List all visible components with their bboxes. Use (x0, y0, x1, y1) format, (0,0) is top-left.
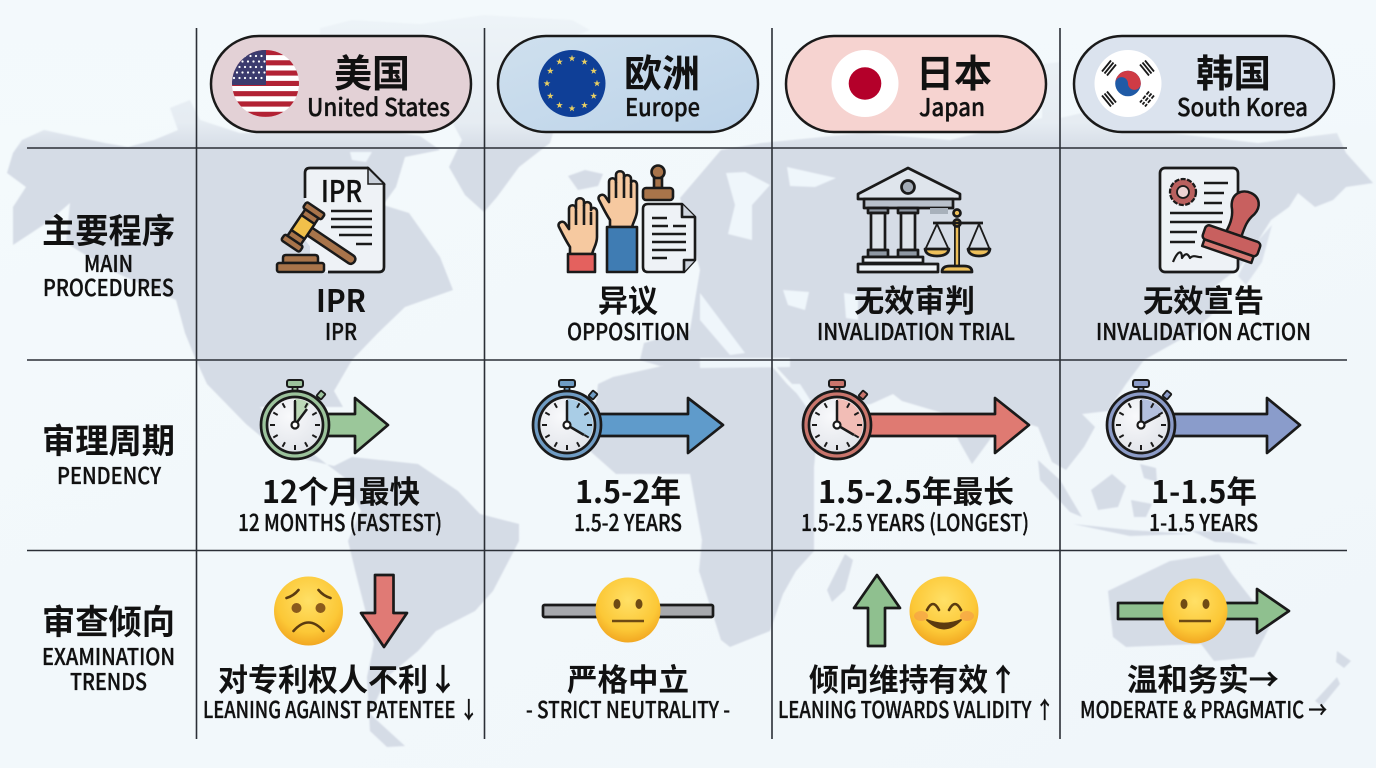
column header: South Korea: 韩国 (1196, 43, 1271, 98)
row heading: main procedures: 主要程序 (42, 204, 175, 253)
label: 1.5-2.5 years: 1.5-2.5年最长 (818, 467, 1014, 512)
column header: Europe: 欧洲 (624, 43, 700, 98)
label: leaning towards validity: 倾向维持有效↑ (809, 655, 1018, 700)
label: 12 months: 12个月最快 (262, 467, 420, 512)
row heading: examination trends: EXAMINATION (42, 638, 175, 672)
label: IPR (316, 276, 366, 347)
column header: Japan (786, 36, 1046, 132)
label: 1.5-2.5 years (801, 467, 1029, 538)
row heading: main procedures (42, 204, 175, 303)
icon: EU flag (538, 50, 606, 117)
label: opposition: OPPOSITION (567, 313, 690, 347)
column header: Europe (498, 36, 758, 132)
icon: certificate and stamp (1160, 168, 1276, 272)
column header: Japan: Japan (919, 89, 985, 124)
label: 1-1.5 years (1149, 467, 1258, 538)
icon: up arrow and smiling face (854, 575, 978, 646)
label: strict neutrality: - STRICT NEUTRALITY - (526, 691, 730, 725)
row heading: pendency: 审理周期 (42, 414, 175, 463)
label: 1-1.5 years: 1-1.5 YEARS (1149, 504, 1258, 538)
row heading: examination trends: TRENDS (70, 663, 147, 697)
label: leaning towards validity: LEANING TOWARDS VALIDITY ↑ (778, 691, 1054, 725)
icon: Japan flag (832, 50, 898, 117)
label: 1.5-2 years: 1.5-2 YEARS (574, 504, 682, 538)
label: opposition: 异议 (598, 276, 658, 321)
label: 1.5-2.5 years: 1.5-2.5 YEARS (LONGEST) (801, 504, 1029, 538)
label: leaning towards validity (778, 655, 1054, 725)
icon: stopwatch with short green arrow (261, 380, 388, 459)
icon: stopwatch with long red arrow (803, 380, 1029, 459)
row heading: examination trends (42, 595, 175, 697)
icon: stopwatch with indigo arrow (1107, 380, 1300, 459)
label: invalidation trial: 无效审判 (854, 276, 975, 321)
label: 1.5-2 years: 1.5-2年 (575, 467, 681, 512)
column header: United States: 美国 (334, 43, 410, 98)
label: moderate and pragmatic (1080, 655, 1327, 725)
label: IPR: IPR (325, 313, 357, 347)
label: IPR: IPR (316, 276, 366, 321)
label: invalidation action (1096, 276, 1311, 347)
icon: IPR document and gavel (277, 167, 384, 281)
icon: neutral face on forward arrow (1118, 578, 1289, 644)
label: 1-1.5 years: 1-1.5年 (1151, 467, 1257, 512)
label: invalidation trial: INVALIDATION TRIAL (817, 313, 1015, 347)
icon: stopwatch with blue arrow (533, 380, 723, 459)
column header: United States (211, 36, 471, 132)
row heading: examination trends: 审查倾向 (42, 595, 175, 644)
label: invalidation action: 无效宣告 (1143, 276, 1264, 321)
icon: neutral face on level bar (543, 578, 713, 642)
label: invalidation trial (817, 276, 1015, 347)
icon: IPR document and gavel: IPR (321, 167, 362, 211)
icon: courthouse and scales (858, 168, 990, 272)
label: invalidation action: INVALIDATION ACTION (1096, 313, 1311, 347)
label: leaning against patentee (203, 655, 478, 725)
row heading: pendency: PENDENCY (57, 457, 161, 491)
icon: South Korea flag (1094, 50, 1162, 117)
label: strict neutrality (526, 655, 730, 725)
icon: raised hands, stamp and document (559, 166, 695, 272)
label: 1.5-2 years (574, 467, 682, 538)
label: 12 months: 12 MONTHS (FASTEST) (238, 504, 442, 538)
row heading: main procedures: MAIN (84, 245, 133, 279)
row heading: pendency (42, 414, 175, 491)
column header: Europe: Europe (625, 89, 700, 124)
label: moderate and pragmatic: 温和务实→ (1127, 655, 1279, 700)
label: opposition (567, 276, 690, 347)
label: moderate and pragmatic: MODERATE & PRAGMATIC → (1080, 691, 1327, 725)
label: strict neutrality: 严格中立 (567, 655, 689, 700)
label: leaning against patentee: LEANING AGAINST PATENTEE ↓ (203, 691, 478, 725)
row heading: main procedures: PROCEDURES (43, 269, 174, 303)
label: 12 months (238, 467, 442, 538)
label: leaning against patentee: 对专利权人不利↓ (218, 655, 458, 700)
column header: United States: United States (307, 89, 450, 124)
column header: Japan: 日本 (916, 43, 992, 98)
column header: South Korea (1074, 36, 1334, 132)
icon: US flag (232, 50, 299, 117)
icon: worried face and down arrow (274, 575, 407, 647)
column header: South Korea: South Korea (1177, 89, 1308, 124)
